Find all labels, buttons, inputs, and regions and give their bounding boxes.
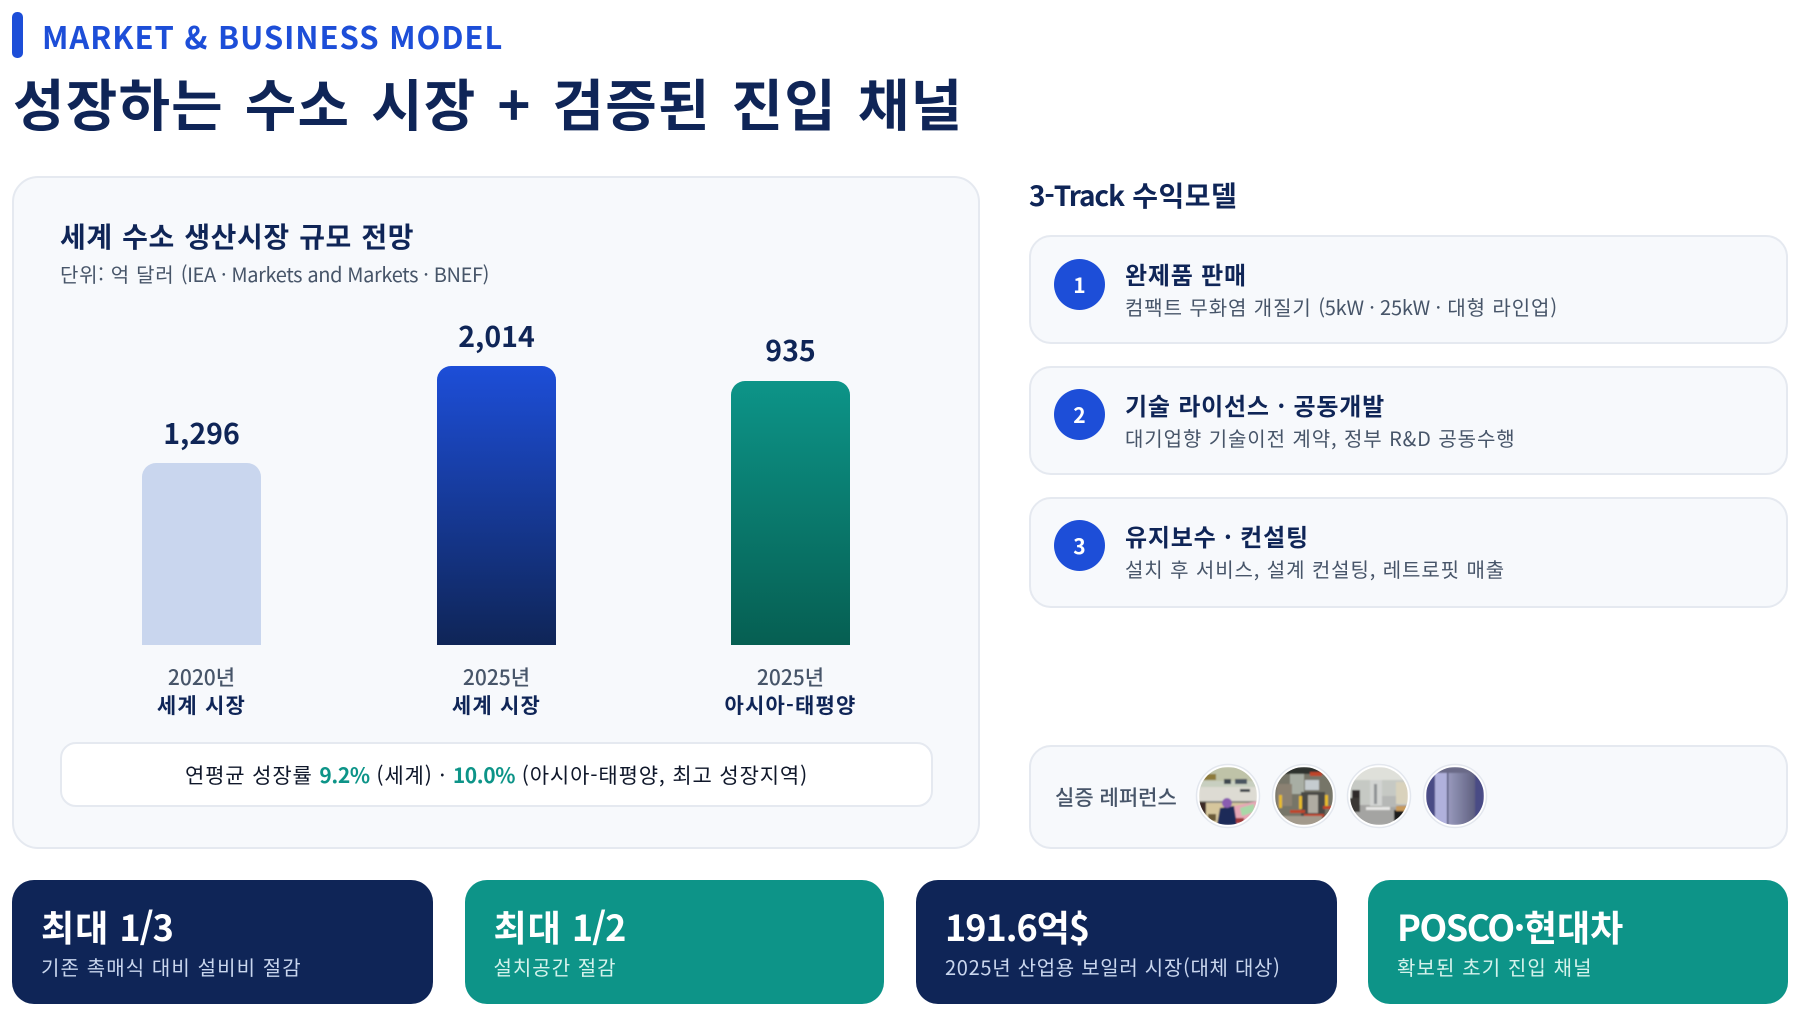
chart unit note: 단위: 억 달러 (IEA · Markets and Markets · BNEF) bbox=[60, 259, 489, 288]
photo 2: equipment bbox=[1272, 764, 1336, 828]
stat card: market bbox=[916, 880, 1337, 1004]
label: 2020 world market: 세계 시장 bbox=[157, 690, 246, 720]
photo 3: lab installation bbox=[1348, 764, 1410, 828]
callout: CAGR bbox=[60, 742, 933, 807]
panel: market size chart bbox=[12, 176, 980, 849]
label: 2025 world market bbox=[452, 662, 541, 720]
track 3 text: 설치 후 서비스, 설계 컨설팅, 레트로핏 매출 bbox=[1125, 554, 1505, 583]
bar chart bbox=[142, 315, 857, 720]
panel: references bbox=[1029, 745, 1788, 849]
value: 2,014: 2,014 bbox=[458, 315, 535, 356]
label: 2025 Asia-Pacific: 2025년 bbox=[757, 662, 824, 692]
stat card: channel bbox=[1368, 880, 1788, 1004]
stat value: 최대 1/3 bbox=[41, 900, 173, 952]
track 1 text: 컴팩트 무화염 개질기 (5kW · 25kW · 대형 라인업) bbox=[1125, 292, 1558, 321]
stat value: POSCO·현대차 bbox=[1397, 900, 1623, 952]
reference photos bbox=[1196, 764, 1488, 828]
bar: 2025 Asia-Pacific bbox=[731, 381, 850, 645]
badge 2: 2 bbox=[1073, 400, 1086, 430]
stat value: 191.6억$ bbox=[945, 900, 1089, 952]
stat caption: 확보된 초기 진입 채널 bbox=[1397, 952, 1593, 981]
bar: 2025 world bbox=[437, 366, 556, 645]
value: 935: 935 bbox=[765, 329, 816, 370]
stat card: capex bbox=[12, 880, 433, 1004]
photo 1: workshop bbox=[1196, 764, 1260, 828]
bar: 2020 world bbox=[142, 463, 261, 645]
track 1 title: 완제품 판매 bbox=[1125, 256, 1247, 291]
label: 2025 Asia-Pacific: 아시아-태평양 bbox=[724, 690, 857, 720]
track 2 title: 기술 라이선스 · 공동개발 bbox=[1125, 387, 1385, 422]
label: 2025 Asia-Pacific bbox=[724, 662, 857, 720]
badge 1: 1 bbox=[1073, 270, 1086, 300]
photo 4: vessel render bbox=[1424, 764, 1486, 828]
badge 3: 3 bbox=[1073, 531, 1086, 561]
panel: track 2 bbox=[1029, 366, 1788, 475]
callout: CAGR: 연평균 성장률 9.2% (세계) · 10.0% (아시아-태평양, 최고 성장지역) bbox=[185, 760, 808, 790]
panel: track 1 bbox=[1029, 235, 1788, 344]
stat caption: 2025년 산업용 보일러 시장(대체 대상) bbox=[945, 952, 1281, 981]
value: 1,296: 1,296 bbox=[163, 412, 240, 453]
badge 2 bbox=[1054, 389, 1105, 440]
label: 2020 world market bbox=[157, 662, 246, 720]
track 2 text: 대기업향 기술이전 계약, 정부 R&D 공동수행 bbox=[1125, 423, 1516, 452]
section label: MARKET & BUSINESS MODEL bbox=[42, 13, 503, 58]
track 3 title: 유지보수 · 컨설팅 bbox=[1125, 518, 1309, 553]
label: 2020 world market: 2020년 bbox=[168, 662, 235, 692]
title: 성장하는 수소 시장 + 검증된 진입 채널 bbox=[13, 62, 963, 143]
stat caption: 기존 촉매식 대비 설비비 절감 bbox=[41, 952, 302, 981]
stat value: 최대 1/2 bbox=[494, 900, 625, 952]
stat caption: 설치공간 절감 bbox=[494, 952, 616, 981]
heading: 3-track: 3-Track 수익모델 bbox=[1029, 175, 1237, 215]
badge 3 bbox=[1054, 520, 1105, 571]
label: 2025 world market: 2025년 bbox=[463, 662, 530, 692]
badge 1 bbox=[1054, 259, 1105, 310]
header accent bar bbox=[12, 12, 23, 58]
panel: track 3 bbox=[1029, 497, 1788, 608]
stat card: footprint bbox=[464, 880, 884, 1004]
chart heading: 세계 수소 생산시장 규모 전망 bbox=[60, 216, 414, 256]
label: 2025 world market: 세계 시장 bbox=[452, 690, 541, 720]
references label: 실증 레퍼런스 bbox=[1055, 782, 1177, 812]
